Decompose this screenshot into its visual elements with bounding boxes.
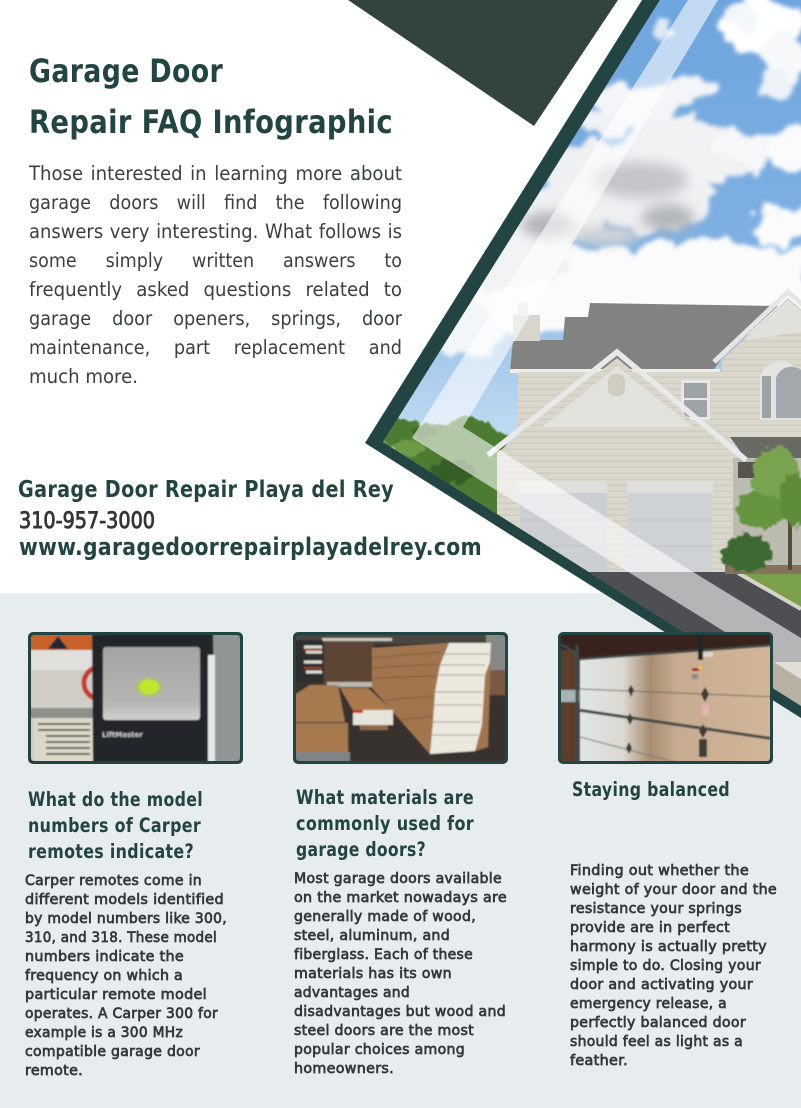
column 2 body text: materials has its own <box>294 966 452 982</box>
column 2 body text <box>294 871 507 1077</box>
column 3 body text: weight of your door and the <box>570 882 777 898</box>
column 2 body text: disadvantages but wood and <box>294 1004 506 1020</box>
title <box>29 52 393 141</box>
garage doors <box>519 481 713 572</box>
contact details: 310-957-3000 <box>19 509 155 534</box>
dark triangle <box>348 0 618 126</box>
intro paragraph: maintenance, part replacement and <box>29 336 402 359</box>
column 1 heading: numbers of Carper <box>28 814 201 837</box>
intro paragraph: frequently asked questions related to <box>29 278 402 301</box>
column 1 body text: different models identified <box>25 892 224 908</box>
column 3 body text: harmony is actually pretty <box>570 939 767 955</box>
lower grey panel <box>0 593 801 1108</box>
column 2 heading: commonly used for <box>296 812 474 835</box>
column 2 heading: What materials are <box>296 786 474 809</box>
translucent glass chevron <box>412 0 801 679</box>
column 1 body text: particular remote model <box>25 987 207 1003</box>
column 3 body text: should feel as light as a <box>570 1034 743 1050</box>
title: Repair FAQ Infographic <box>29 103 393 141</box>
column 2 body text: steel, aluminum, and <box>294 928 450 944</box>
column 3 body text: Finding out whether the <box>570 863 749 879</box>
house <box>488 292 801 573</box>
column 1 body text: by model numbers like 300, <box>25 911 227 927</box>
shrub and tree <box>723 448 801 574</box>
column 1 body text: frequency on which a <box>25 968 183 984</box>
column 1 body text: remote. <box>25 1063 83 1079</box>
distant trees <box>383 415 507 520</box>
column 1 heading: remotes indicate? <box>28 840 194 863</box>
column 1 body text: compatible garage door <box>25 1044 200 1060</box>
photo: house and sky <box>360 0 801 722</box>
intro paragraph <box>28 162 403 388</box>
column 3 body text: feather. <box>570 1053 628 1069</box>
intro paragraph: some simply written answers to <box>29 249 402 272</box>
card 1: remote photo <box>26 630 245 766</box>
intro paragraph: garage doors will find the following <box>29 191 402 214</box>
title: Garage Door <box>29 52 223 90</box>
card 2: door panels photo <box>291 630 510 766</box>
column 3 heading: Staying balanced <box>572 778 730 801</box>
intro paragraph: much more. <box>29 365 138 388</box>
column 2 body text: homeowners. <box>294 1061 394 1077</box>
column 2 body text: steel doors are the most <box>294 1023 474 1039</box>
driveway <box>589 572 801 706</box>
column 1 body text: example is a 300 MHz <box>25 1025 183 1041</box>
column 2 body text: generally made of wood, <box>294 909 476 925</box>
dark green chevron band <box>365 0 801 718</box>
column 2 heading <box>296 786 474 861</box>
column 2 body text: on the market nowadays are <box>294 890 507 906</box>
column 3 body text: resistance your springs <box>570 901 742 917</box>
column 1 body text: operates. A Carper 300 for <box>25 1006 218 1022</box>
column 2 body text: advantages and <box>294 985 410 1001</box>
column 1 body text <box>25 873 227 1079</box>
column 3 body text: emergency release, a <box>570 996 727 1012</box>
column 3 body text: perfectly balanced door <box>570 1015 746 1031</box>
column 3 body text: provide are in perfect <box>570 920 730 936</box>
contact details <box>18 475 482 561</box>
intro paragraph: answers very interesting. What follows is <box>29 220 402 243</box>
column 2 body text: popular choices among <box>294 1042 465 1058</box>
column 2 body text: Most garage doors available <box>294 871 502 887</box>
column 1 body text: 310, and 318. These model <box>25 930 217 946</box>
intro paragraph: Those interested in learning more about <box>28 162 402 185</box>
column 3 body text: door and activating your <box>570 977 753 993</box>
intro paragraph: garage door openers, springs, door <box>29 307 403 330</box>
column 1 heading <box>28 788 203 863</box>
column 3 body text: simple to do. Closing your <box>570 958 761 974</box>
column 2 heading: garage doors? <box>296 838 426 861</box>
contact details: www.garagedoorrepairplayadelrey.com <box>19 533 482 561</box>
column 1 heading: What do the model <box>28 788 203 811</box>
lawn and curb <box>738 573 801 707</box>
column 1 body text: Carper remotes come in <box>25 873 202 889</box>
column 1 body text: numbers indicate the <box>25 949 184 965</box>
card 3: door springs photo <box>556 630 775 766</box>
contact details: Garage Door Repair Playa del Rey <box>18 475 394 503</box>
column 3 body text <box>570 863 777 1069</box>
column 2 body text: fiberglass. Each of these <box>294 947 473 963</box>
card 1: remote photo: LiftMaster <box>102 731 143 739</box>
